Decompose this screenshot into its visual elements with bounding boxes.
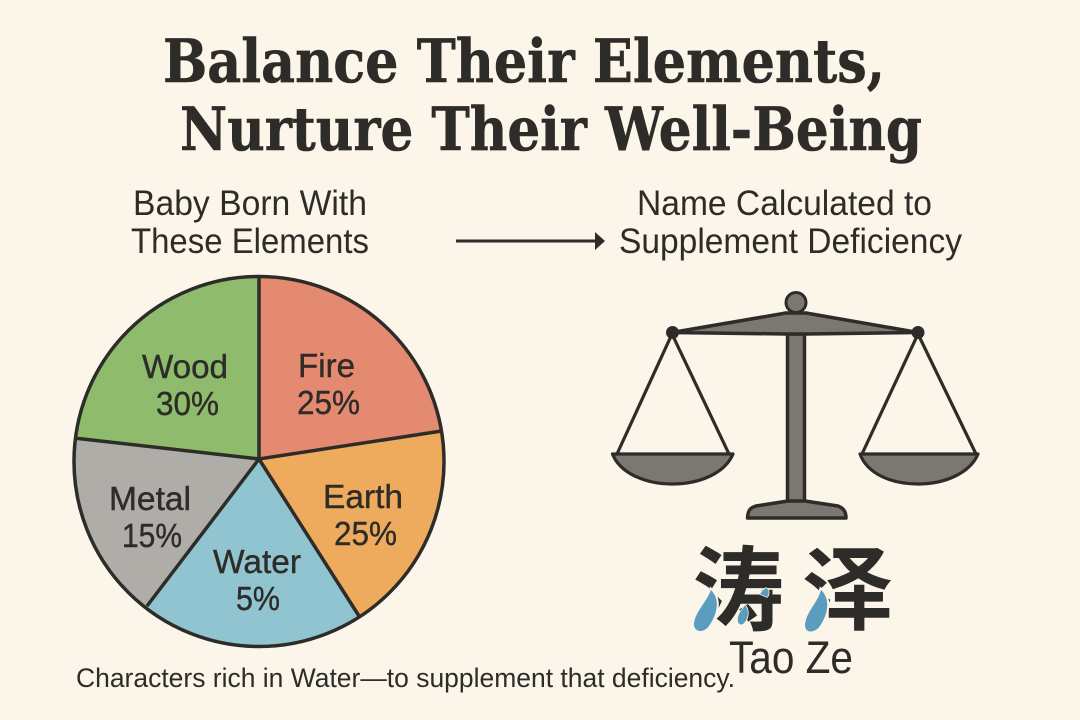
slice: wood <box>74 276 259 459</box>
slice: earth <box>259 431 444 617</box>
chinese name characters with water drops: 涛 <box>692 541 784 643</box>
label: earth <box>323 478 403 552</box>
title: Balance Their Elements, <box>163 27 885 97</box>
heading: name calculated to supplement deficiency <box>619 184 962 261</box>
pie chart <box>73 276 444 646</box>
icon: balance scale <box>612 292 978 518</box>
label: wood: Wood <box>142 348 228 385</box>
right pan strings <box>862 334 976 454</box>
label: fire: 25% <box>297 384 360 421</box>
scale post <box>788 334 804 502</box>
pinyin name: Tao Ze <box>729 632 853 683</box>
scale beam <box>672 313 918 334</box>
label: water <box>213 543 301 617</box>
heading: name calculated to supplement deficiency: Name Calculated to <box>637 184 932 223</box>
heading: baby born with these elements: Baby Born With <box>133 184 367 223</box>
water drops <box>694 588 827 632</box>
heading: baby born with these elements: These Elements <box>131 222 369 261</box>
heading: baby born with these elements <box>131 184 369 261</box>
label: fire: Fire <box>298 347 355 384</box>
footer caption: Characters rich in Water—to supplement that deficiency. <box>76 663 735 693</box>
arrow <box>456 232 605 250</box>
label: earth: Earth <box>323 478 403 515</box>
left pan strings <box>617 334 729 454</box>
slice: metal <box>73 438 259 607</box>
heading: name calculated to supplement deficiency: Supplement Deficiency <box>619 222 962 261</box>
pie outline and spokes <box>74 276 444 646</box>
beam joints <box>666 326 924 339</box>
scale knob <box>786 292 806 312</box>
label: metal <box>109 480 191 554</box>
scale base <box>748 501 846 518</box>
right pan <box>860 454 978 484</box>
left pan <box>612 454 733 484</box>
title <box>163 27 922 165</box>
label: water: Water <box>213 543 301 580</box>
slice: water <box>147 459 359 646</box>
label: fire <box>297 347 360 421</box>
chinese name characters with water drops: 泽 <box>802 541 894 643</box>
slice: fire <box>259 276 442 459</box>
label: metal: Metal <box>109 480 191 517</box>
label: metal: 15% <box>122 517 182 554</box>
label: wood <box>142 348 228 422</box>
label: water: 5% <box>236 580 280 617</box>
chinese name characters with water drops <box>692 541 894 643</box>
label: wood: 30% <box>156 385 219 422</box>
title: Nurture Their Well-Being <box>180 95 922 165</box>
label: earth: 25% <box>334 515 397 552</box>
